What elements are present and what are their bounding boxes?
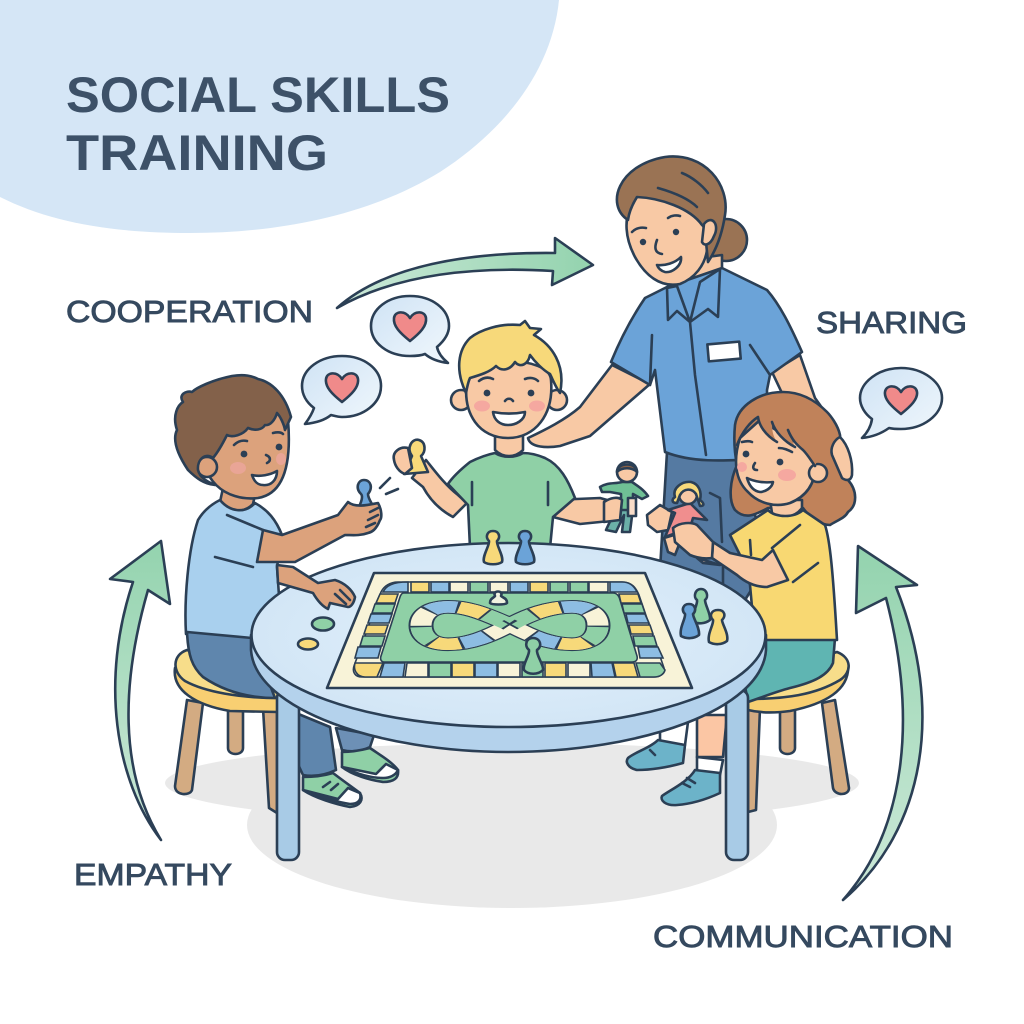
far shoe — [627, 740, 685, 770]
speech bubble: middle — [371, 296, 449, 363]
stool right seat — [748, 665, 848, 712]
teacher pants — [660, 452, 770, 600]
table side — [251, 635, 766, 752]
far shoe — [342, 748, 398, 782]
table legs — [277, 690, 299, 860]
teacher hand on hair — [831, 437, 852, 480]
speech bubble: right — [860, 368, 942, 438]
background blob — [0, 0, 559, 233]
label: empathy: EMPATHY — [74, 857, 232, 892]
stool left seat — [175, 668, 278, 712]
stool left legs — [175, 700, 203, 794]
far sock — [660, 722, 688, 745]
small cream pawn on board — [490, 592, 507, 604]
stool: left — [175, 650, 278, 813]
teacher features — [632, 215, 681, 272]
girl face — [736, 420, 816, 505]
left boy features — [234, 432, 283, 485]
near hand — [673, 523, 713, 558]
left boy near arm — [257, 502, 381, 562]
girl neck — [770, 500, 802, 517]
teacher near arm — [528, 365, 650, 447]
teacher face — [627, 190, 716, 285]
left boy face — [204, 410, 289, 498]
boy doll — [600, 462, 648, 532]
teacher hair — [617, 156, 726, 262]
middle boy hair — [459, 321, 561, 393]
middle boy face — [466, 361, 551, 438]
far hand — [647, 505, 672, 532]
near leg — [697, 715, 727, 757]
board left column — [355, 594, 398, 658]
girl legs — [627, 715, 727, 805]
near shoe — [303, 773, 362, 807]
far leg — [336, 728, 374, 751]
girl arm — [712, 542, 788, 587]
middle boy arms — [412, 460, 467, 517]
title — [66, 67, 450, 181]
left boy legs — [296, 713, 398, 807]
table — [251, 543, 766, 860]
left boy hair — [175, 375, 291, 485]
label: cooperation: COOPERATION — [66, 294, 313, 329]
arrow: top — [337, 238, 593, 308]
teacher far arm — [772, 355, 825, 412]
girl fringe — [737, 396, 830, 466]
middle boy — [380, 321, 625, 548]
teacher shirt — [611, 268, 802, 460]
arrow: right — [843, 546, 922, 900]
doll head — [679, 486, 697, 504]
figure eight track — [421, 607, 598, 644]
teacher ear — [702, 220, 716, 244]
middle boy ears — [451, 390, 471, 410]
motion marks — [380, 478, 398, 494]
title: TRAINING — [66, 125, 328, 181]
arrow: left — [110, 541, 170, 840]
label: communication: COMMUNICATION — [653, 919, 953, 954]
left boy pawn — [357, 480, 373, 510]
near shoe — [662, 770, 720, 805]
near sock — [697, 757, 723, 775]
teacher collar and badge — [667, 269, 720, 322]
heart — [394, 312, 426, 341]
girl features — [742, 441, 792, 492]
middle boy features — [479, 378, 538, 425]
title: SOCIAL SKILLS — [66, 67, 450, 123]
left boy shirt — [186, 500, 282, 640]
pawns at table edge — [484, 531, 534, 564]
table top — [252, 543, 766, 727]
teacher — [528, 156, 825, 600]
left boy neck — [220, 488, 255, 511]
pawns on right of table — [681, 589, 727, 644]
girl back hair — [731, 392, 855, 525]
middle boy shirt — [448, 453, 575, 548]
teacher bun — [705, 219, 747, 261]
board centre — [381, 593, 637, 662]
girl skirt — [740, 638, 835, 702]
stool right legs — [748, 708, 760, 812]
board top row — [383, 582, 637, 592]
board track base — [353, 582, 664, 677]
board bottom row — [354, 663, 665, 677]
left boy — [175, 375, 381, 698]
girl — [712, 392, 855, 702]
speech bubble: left — [302, 356, 381, 424]
tokens — [298, 618, 334, 650]
middle boy hand and pawn — [404, 440, 428, 474]
floor shadow — [165, 742, 859, 908]
girl doll — [647, 482, 720, 565]
left boy pants — [187, 632, 275, 698]
stool: right — [748, 652, 849, 812]
label: sharing: SHARING — [816, 305, 967, 340]
doll dress — [665, 503, 707, 537]
large green pawn on board — [524, 638, 543, 674]
middle boy neck — [495, 432, 523, 456]
board — [327, 573, 692, 688]
board right column — [619, 594, 663, 658]
left boy far arm and hand over table — [277, 565, 355, 609]
girl shirt — [730, 510, 837, 640]
heart — [885, 386, 917, 414]
heart — [326, 373, 358, 402]
near leg — [296, 713, 336, 776]
teacher neck — [668, 255, 722, 292]
